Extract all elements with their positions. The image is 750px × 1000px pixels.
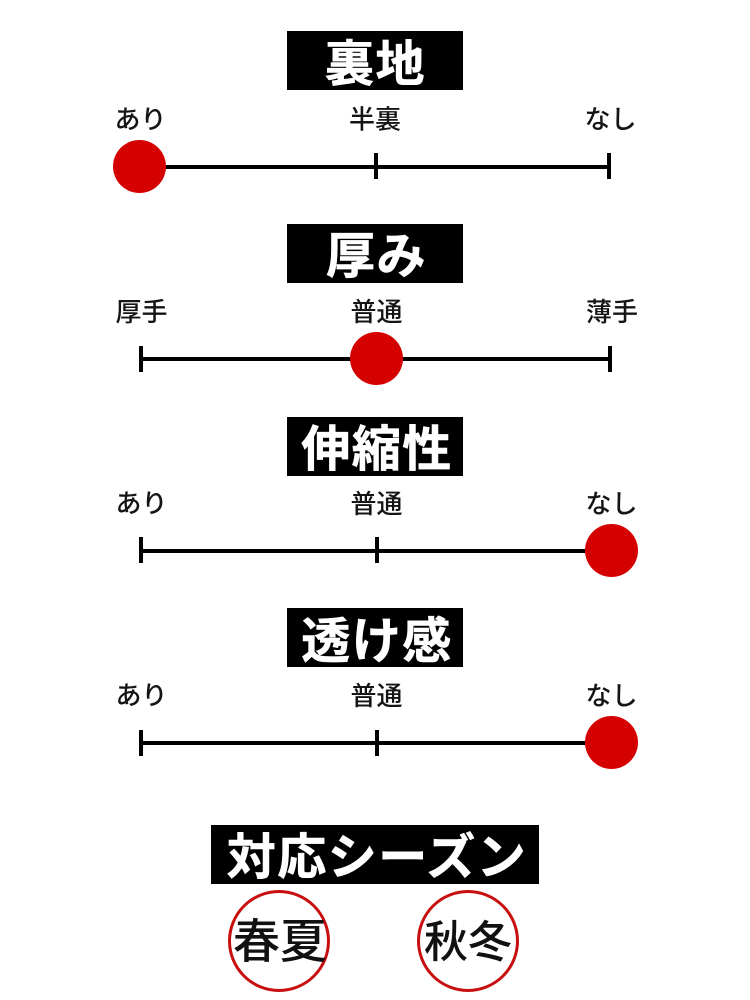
scale labels: thickness: 厚手: [115, 297, 168, 327]
scale labels: stretch: 普通: [350, 489, 403, 519]
scale labels: thickness: 普通: [350, 297, 403, 327]
heading: transparency: 透け感: [301, 615, 453, 669]
scale labels: transparency: あり: [115, 680, 168, 710]
slider: transparency: [141, 716, 638, 769]
panel: lining scale: [113, 31, 637, 193]
scale labels: transparency: なし: [585, 681, 638, 711]
panel: thickness scale: [115, 224, 638, 385]
badge: spring summer: [230, 892, 328, 990]
badge: autumn winter: 秋冬: [424, 918, 512, 967]
slider: stretch: [141, 524, 638, 577]
scale labels: lining: 半裏: [349, 104, 401, 134]
heading: thickness: [287, 224, 463, 284]
scale labels: stretch: なし: [585, 489, 638, 519]
scale labels: transparency: 普通: [350, 681, 403, 711]
scale labels: lining: なし: [584, 104, 637, 134]
heading: seasons: 対応シーズン: [227, 831, 527, 885]
scale labels: stretch: [115, 488, 638, 519]
badge: spring summer: 春夏: [233, 915, 327, 968]
slider: lining: [113, 140, 609, 193]
scale labels: lining: あり: [114, 104, 167, 134]
panel: stretch scale: [115, 417, 638, 577]
badge: autumn winter: [418, 892, 518, 990]
heading: lining: [287, 31, 463, 92]
heading: thickness: 厚み: [326, 230, 427, 284]
heading: lining: 裏地: [325, 38, 426, 92]
scale labels: thickness: 薄手: [586, 297, 638, 327]
slider: thickness: [141, 332, 610, 385]
scale labels: lining: [114, 104, 637, 134]
panel: transparency scale: [115, 608, 638, 769]
scale labels: stretch: あり: [115, 488, 168, 518]
heading: stretch: 伸縮性: [301, 423, 453, 477]
panel: seasons: [211, 825, 539, 990]
scale labels: transparency: [115, 680, 638, 711]
scale labels: thickness: [115, 297, 638, 327]
